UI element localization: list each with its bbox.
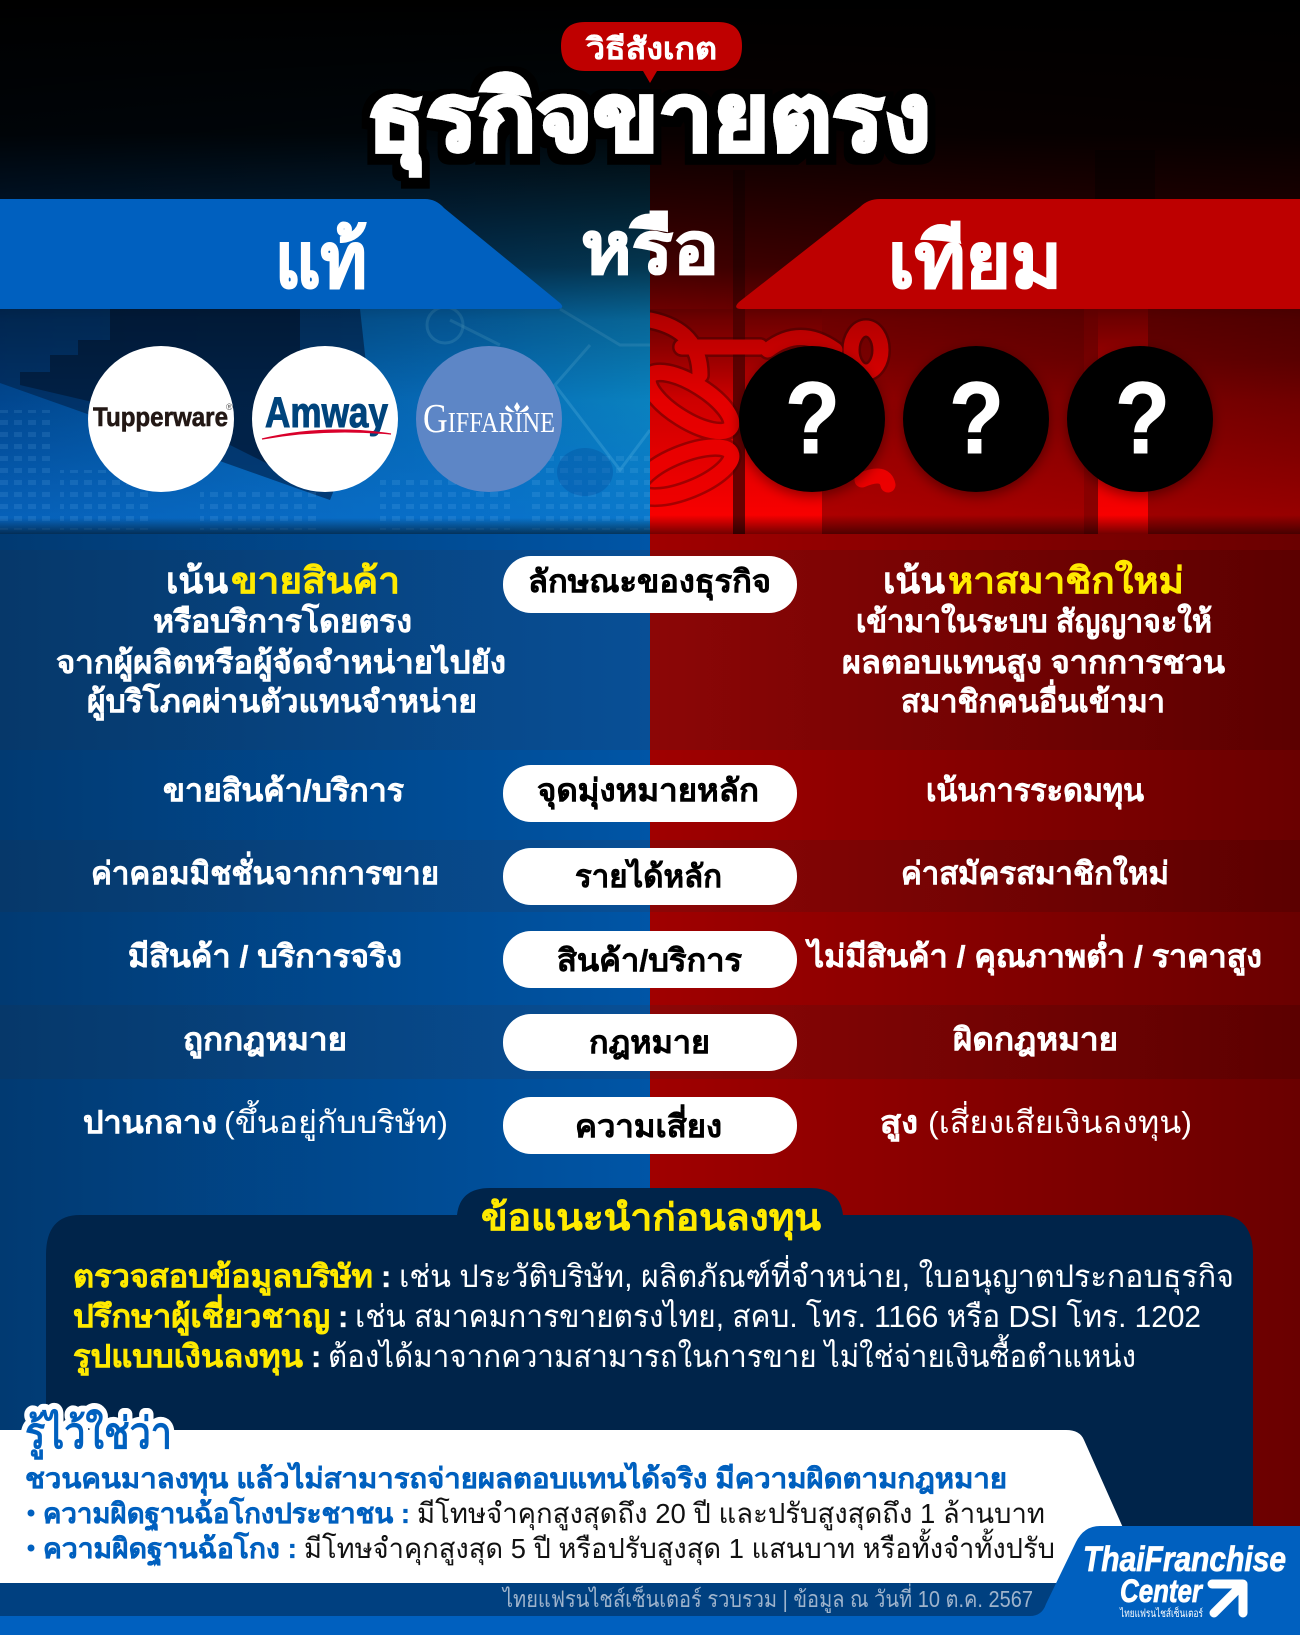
advice line 2: : — [338, 1299, 348, 1334]
row 6: risk: (ขึ้นอยู่กับบริษัท) — [224, 1100, 448, 1141]
row 1: business character — [56, 556, 1225, 721]
advice line 3: ต้องได้มาจากความสามารถในการขาย ไม่ใช่จ่ายเงินซื้อตำแหน่ง — [328, 1334, 1136, 1374]
unknown brand circle 1 — [739, 346, 885, 496]
fake description — [842, 559, 1225, 719]
row 3: main income: รายได้หลัก — [575, 858, 722, 894]
panel: advice before investing — [46, 1188, 1253, 1535]
row 2: main goal: ขายสินค้า/บริการ — [163, 773, 404, 808]
logo: Tupperware: ® — [226, 402, 233, 412]
row 5: law: กฎหมาย — [589, 1025, 710, 1060]
note heading: รู้ไว้ใช่ว่า — [25, 1408, 172, 1460]
advice line 1: เช่น ประวัติบริษัท, ผลิตภัณฑ์ที่จำหน่าย, ใบอนุญาตประกอบธุรกิจ — [399, 1255, 1234, 1296]
fake description: หาสมาชิกใหม่ — [948, 559, 1184, 601]
row 6: risk — [83, 1097, 1192, 1154]
note bullet 1: มีโทษจำคุกสูงสุดถึง 20 ปี และปรับสูงสุดถึง 1 ล้านบาท — [417, 1497, 1045, 1531]
row 6: risk: สูง — [880, 1105, 918, 1142]
logo: Giffarine: GIFFARINE — [423, 395, 555, 441]
row 3: main income: ค่าคอมมิชชั่นจากการขาย — [91, 851, 439, 891]
genuine description — [56, 560, 506, 721]
advice line 2: เช่น สมาคมการขายตรงไทย, สคบ. โทร. 1166 หรือ DSI โทร. 1202 — [355, 1299, 1201, 1334]
row 6: risk: (เสี่ยงเสียเงินลงทุน) — [928, 1101, 1192, 1142]
banner: genuine — [0, 199, 562, 309]
icon: arrow — [1212, 1584, 1243, 1613]
title: ธุรกิจขายตรง — [367, 65, 931, 176]
advice line 3: : — [311, 1339, 321, 1374]
note bullet 2: ความผิดฐานฉ้อโกง : — [43, 1531, 297, 1567]
fake description: ผลตอบแทนสูง จากการชวน — [842, 645, 1225, 682]
row 4: product: สินค้า/บริการ — [557, 943, 742, 978]
row 6: risk: ความเสี่ยง — [575, 1104, 722, 1144]
note bullet 1 — [28, 1496, 1045, 1532]
row 2: main goal — [163, 765, 1144, 822]
callout pill: วิธีสังเกต: วิธีสังเกต — [585, 33, 717, 66]
background: lower columns — [0, 534, 1300, 1635]
row 3: main income — [91, 848, 1169, 905]
unknown brand circle 3: ? — [1115, 361, 1170, 475]
genuine description: ผู้บริโภคผ่านตัวแทนจำหน่าย — [87, 683, 477, 721]
row 2: main goal: เน้นการระดมทุน — [926, 773, 1144, 810]
background: red half — [650, 134, 1300, 534]
logo: ThaiFranchise Center: ไทยแฟรนไชส์เซ็นเตอร์ — [1119, 1606, 1203, 1620]
label pill: business character: ลักษณะของธุรกิจ — [528, 564, 771, 601]
logo: ThaiFranchise Center: Center — [1120, 1573, 1203, 1609]
row 5: law: ถูกกฎหมาย — [183, 1022, 347, 1059]
callout pill: วิธีสังเกต — [561, 22, 742, 83]
advice line 1 — [73, 1255, 1234, 1296]
advice line 3: รูปแบบเงินลงทุน — [73, 1339, 303, 1376]
genuine description: ขายสินค้า — [231, 560, 400, 601]
word: or: หรือ — [581, 209, 719, 289]
row 6: risk: ปานกลาง — [83, 1105, 217, 1140]
row 5: law — [183, 1014, 1118, 1071]
row 4: product: มีสินค้า / บริการจริง — [128, 939, 402, 974]
note bullet 1: ความผิดฐานฉ้อโกงประชาชน : — [43, 1496, 410, 1532]
genuine description: หรือบริการโดยตรง — [153, 603, 412, 639]
row 5: law: ผิดกฎหมาย — [953, 1022, 1118, 1057]
advice heading: ข้อแนะนำก่อนลงทุน — [481, 1197, 821, 1241]
genuine description: เน้น — [166, 560, 228, 601]
banner: fake — [736, 199, 1300, 309]
unknown brand circle 3 — [1067, 346, 1213, 496]
genuine description: จากผู้ผลิตหรือผู้จัดจำหน่ายไปยัง — [56, 644, 506, 682]
advice line 1: : — [381, 1259, 391, 1294]
advice line 2: ปรึกษาผู้เชี่ยวชาญ — [73, 1294, 330, 1336]
note bullet 2 — [28, 1528, 1055, 1567]
logo: ThaiFranchise Center — [1030, 1526, 1300, 1635]
note lead: ชวนคนมาลงทุน แล้วไม่สามารถจ่ายผลตอบแทนได้จริง มีความผิดตามกฎหมาย — [25, 1462, 1007, 1496]
advice line 3 — [73, 1334, 1136, 1376]
advice line 2 — [73, 1294, 1201, 1336]
logo: Amway — [252, 346, 398, 492]
logo: Tupperware — [88, 346, 234, 492]
fake description: สมาชิกคนอื่นเข้ามา — [901, 679, 1165, 719]
banner: genuine: แท้ — [275, 219, 367, 304]
background: blue half — [0, 0, 650, 534]
unknown brand circle 2: ? — [949, 361, 1004, 475]
footer bar — [0, 1583, 1300, 1635]
fake description: เน้น — [883, 560, 945, 601]
banner: fake: เทียม — [888, 219, 1062, 304]
row 2: main goal: จุดมุ่งหมายหลัก — [537, 773, 759, 810]
panel: legal note — [0, 1408, 1124, 1583]
unknown brand circle 1: ? — [785, 361, 840, 475]
fake description: เข้ามาในระบบ สัญญาจะให้ — [856, 603, 1212, 640]
logo: Tupperware: Tupperware — [93, 402, 228, 432]
row 4: product — [128, 931, 1262, 988]
row 3: main income: ค่าสมัครสมาชิกใหม่ — [901, 855, 1169, 891]
logo: Giffarine — [416, 346, 562, 492]
label pill: business character — [503, 556, 797, 613]
footer bar: ไทยแฟรนไชส์เซ็นเตอร์ รวบรวม | ข้อมูล ณ วันที่ 10 ต.ค. 2567 — [501, 1583, 1033, 1613]
row 4: product: ไม่มีสินค้า / คุณภาพต่ำ / ราคาสูง — [805, 934, 1262, 976]
note bullet 2: มีโทษจำคุกสูงสุด 5 ปี หรือปรับสูงสุด 1 แสนบาท หรือทั้งจำทั้งปรับ — [304, 1528, 1055, 1566]
unknown brand circle 2 — [903, 346, 1049, 496]
advice line 1: ตรวจสอบข้อมูลบริษัท — [73, 1259, 373, 1296]
logo: Amway: Amway — [265, 389, 388, 437]
